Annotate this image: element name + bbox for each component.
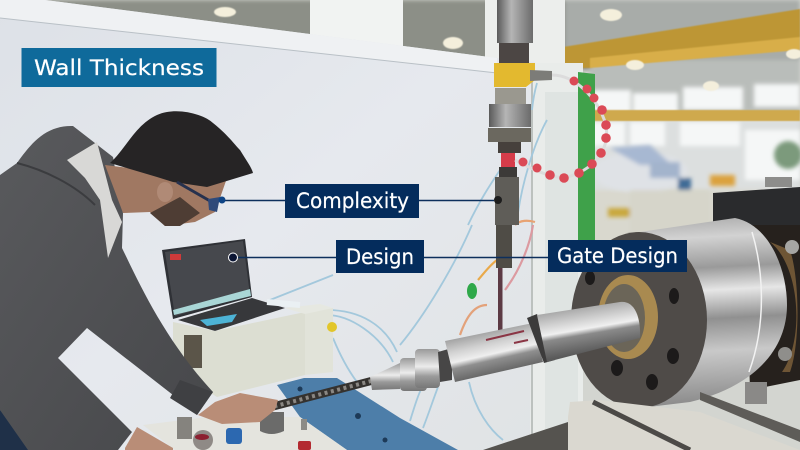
label: Design: Design	[346, 245, 414, 269]
blurred vehicles and figures	[592, 141, 800, 235]
equipment box	[173, 302, 337, 397]
right hand	[198, 393, 278, 424]
glasses	[177, 182, 217, 205]
ear	[157, 182, 173, 202]
label: Complexity: Complexity	[296, 189, 409, 213]
label: Complexity	[285, 184, 419, 218]
windows	[590, 84, 800, 180]
threaded screw	[248, 380, 375, 413]
black upper machine block	[713, 177, 800, 390]
label: Gate Design	[548, 240, 687, 272]
red beaded coolant hose	[515, 75, 611, 183]
lower beam	[590, 110, 800, 121]
label: Design	[336, 240, 424, 273]
control cabinet	[530, 63, 595, 450]
hoodie torso and arm	[0, 126, 213, 450]
leader line: complexity	[218, 196, 494, 204]
vertical spindle tool	[488, 0, 552, 335]
label: Gate Design: Gate Design	[557, 244, 678, 268]
ceiling lamps	[214, 7, 800, 91]
bench with fixtures	[143, 412, 347, 450]
laptop	[162, 239, 285, 331]
blue hoses	[270, 83, 547, 440]
beard	[150, 197, 200, 226]
neck and face	[105, 165, 227, 226]
label: Wall Thickness	[22, 48, 216, 87]
worker	[0, 111, 278, 450]
white wall panel	[0, 0, 535, 450]
stepped metal shaft	[370, 314, 555, 391]
columns	[310, 0, 403, 48]
orange and green tubes	[460, 221, 535, 335]
ceiling beam	[563, 9, 800, 68]
leader line: design	[228, 253, 548, 262]
left hand	[125, 427, 173, 450]
yellow clamp	[494, 63, 535, 87]
hoodie fold	[17, 163, 95, 205]
large chuck cylinder	[537, 218, 787, 408]
shirt collar	[67, 142, 122, 258]
machine base	[483, 382, 800, 450]
jeans	[0, 410, 30, 450]
blue plate	[277, 378, 458, 450]
hair	[110, 111, 253, 187]
label: Wall Thickness: Wall Thickness	[34, 56, 204, 80]
